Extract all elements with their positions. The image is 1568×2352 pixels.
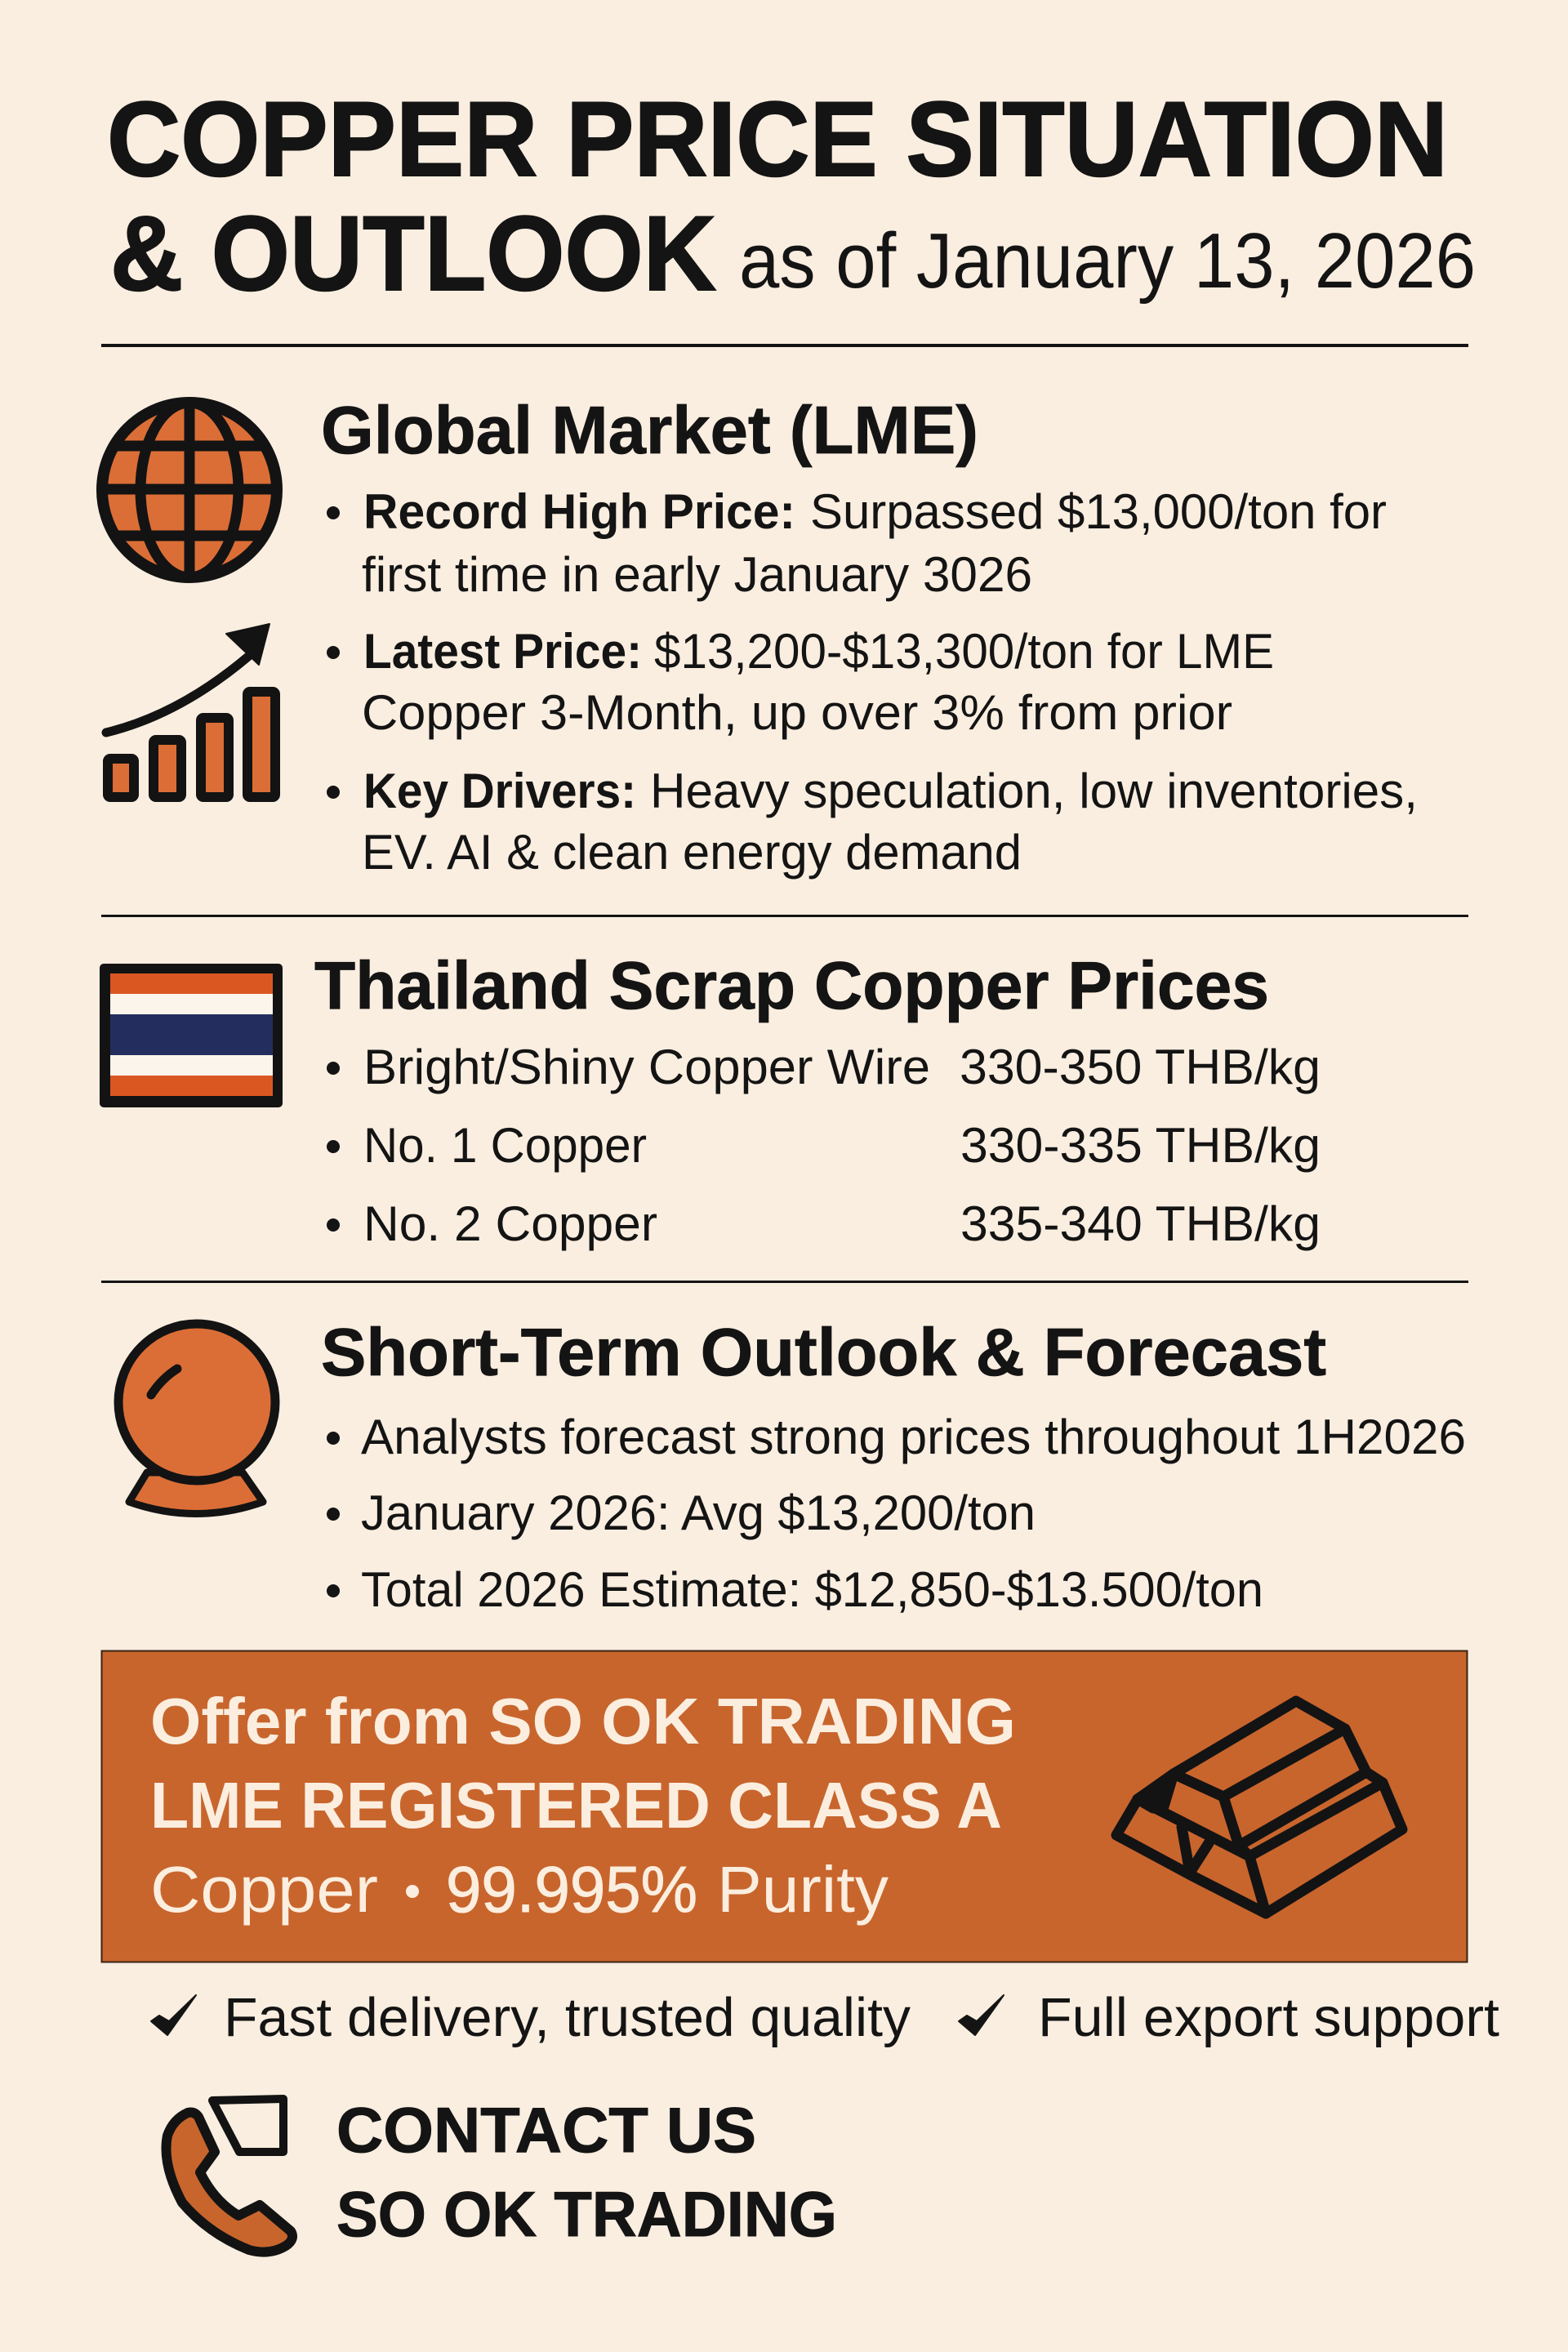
contact text: CONTACT US [336,2094,756,2166]
price row: bright wire: 330-350 THB/kg [960,1040,1321,1094]
bullet: latest price [327,624,1274,740]
icon: copper ingots [1116,1701,1402,1913]
price row: bright wire: Bright/Shiny Copper Wire [363,1040,930,1094]
price row: no. 1 copper: No. 1 Copper [363,1118,647,1173]
bullet: january 2026 average: January 2026: Avg $13,200/ton [361,1486,1036,1540]
price row: no. 1 copper [327,1118,1321,1173]
offer text: Offer from SO OK TRADING [150,1685,1016,1757]
icon: rising bar chart with arrow [106,624,275,797]
offer text: Purity [717,1853,889,1926]
contact text [336,2094,837,2250]
offer text: 99.995% [446,1853,697,1926]
benefits row [151,1987,1499,2048]
benefit: fast delivery: Fast delivery, trusted quality [224,1987,911,2048]
bullet: latest price: $13,200-$13,300/ton for LME [654,624,1274,679]
benefit: export support: Full export support [1038,1987,1499,2048]
heading: thailand scrap copper prices: Thailand Scrap Copper Prices [314,947,1269,1023]
offer text [150,1685,1016,1926]
title [107,79,1476,313]
bullet: latest price: Copper 3-Month, up over 3% from prior [362,685,1232,740]
panel: offer banner [101,1651,1467,1962]
title: as of January 13, 2026 [739,217,1476,305]
bullet: key drivers [327,764,1418,880]
bullet: total 2026 estimate: Total 2026 Estimate: $12,850-$13.500/ton [361,1562,1263,1617]
heading: short-term outlook: Short-Term Outlook & Forecast [321,1314,1326,1390]
icon: thai flag [100,964,283,1107]
bullet: key drivers: Key Drivers: [363,764,636,818]
icon: check [959,1995,1004,2035]
price row: no. 1 copper: 330-335 THB/kg [960,1118,1321,1173]
bullet: record high price: Surpassed $13,000/ton for [810,484,1387,539]
title: COPPER PRICE SITUATION [107,79,1448,198]
price row: no. 2 copper [327,1196,1321,1251]
price row: no. 2 copper: 335-340 THB/kg [960,1196,1321,1251]
contact block [166,2094,837,2252]
bullet: analysts forecast: Analysts forecast strong prices throughout 1H2026 [361,1410,1466,1464]
bullet: key drivers: Heavy speculation, low inventories, [650,764,1418,818]
heading: global market: Global Market (LME) [321,392,978,468]
offer text: Copper [150,1853,378,1926]
bullet: latest price: Latest Price: [363,624,642,679]
bullet: key drivers: EV. AI & clean energy demand [362,825,1022,880]
panel: global market [102,392,1418,880]
icon: crystal ball [118,1324,275,1514]
price row: bright wire [327,1040,1321,1094]
panel: short-term outlook and forecast [118,1314,1466,1617]
icon: phone [166,2099,292,2252]
offer text: LME REGISTERED CLASS A [150,1769,1002,1842]
icon: check [151,1995,196,2035]
bullet: record high price: Record High Price: [363,484,795,539]
bullet: record high price: first time in early January 3026 [362,547,1032,602]
contact text: SO OK TRADING [336,2178,837,2250]
panel: thailand scrap copper prices [100,947,1321,1251]
title: & OUTLOOK [110,194,716,313]
bullet: record high price [327,484,1387,602]
icon: globe [102,403,277,577]
price row: no. 2 copper: No. 2 Copper [363,1196,657,1251]
